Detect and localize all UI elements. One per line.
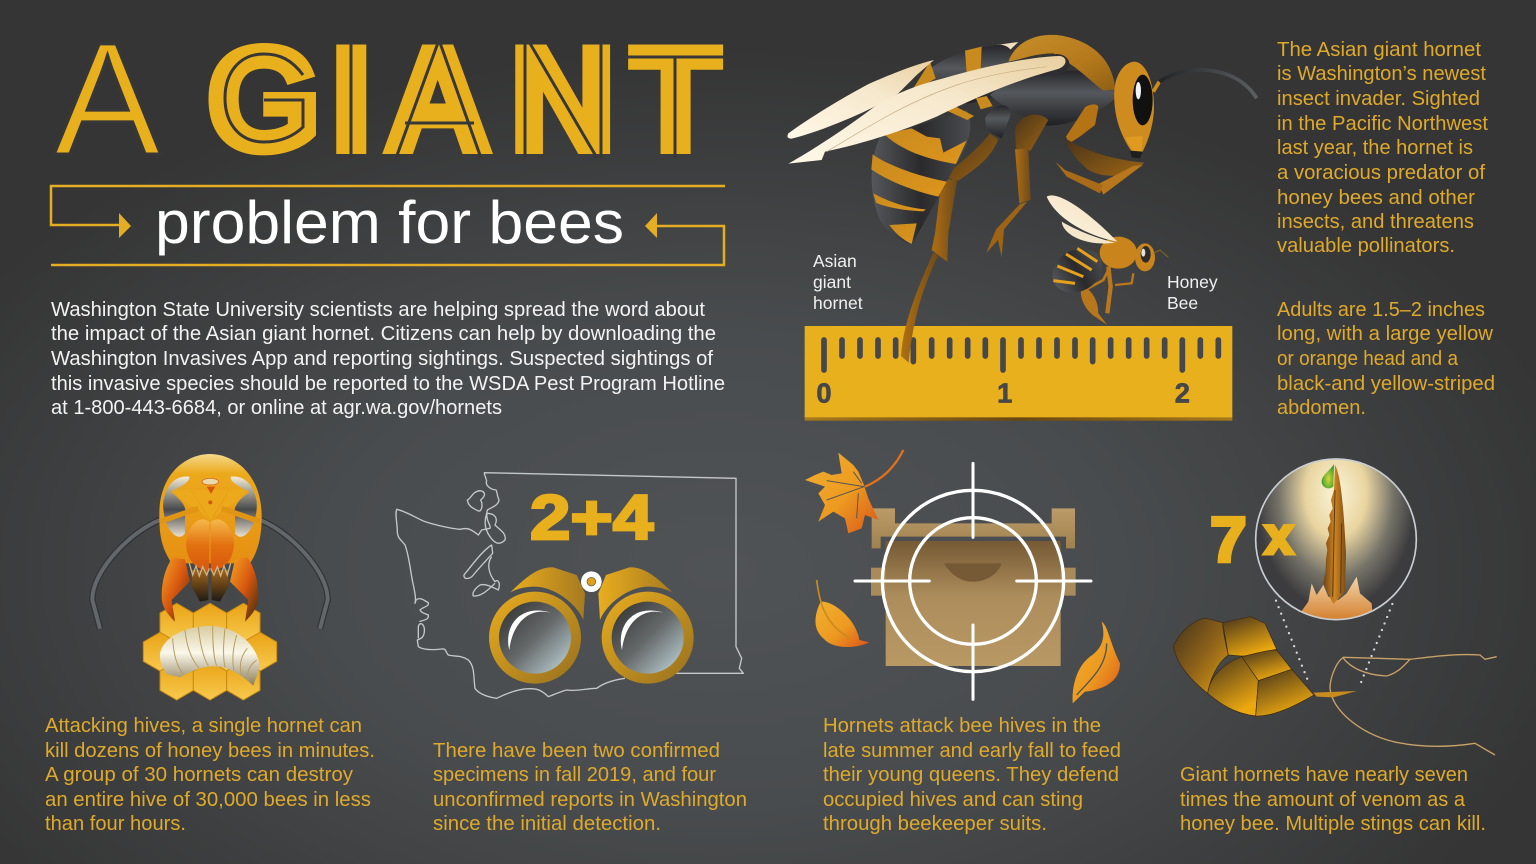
caption: timing: through beekeeper suits. <box>823 812 1047 835</box>
arrow: right-pointing <box>119 213 131 238</box>
right column text: size description <box>1277 298 1495 419</box>
hornet head and honeycomb illustration <box>92 454 328 700</box>
beehive target illustration <box>805 450 1120 703</box>
intro text block <box>51 298 725 419</box>
caption: venom: honey bee. Multiple stings can kill. <box>1180 812 1486 835</box>
caption: sightings <box>433 739 747 835</box>
ruler numbers <box>816 377 1190 408</box>
outer mandibles <box>162 557 190 622</box>
stat: 2+4: 2+4 <box>530 483 653 553</box>
title: A GIANT <box>54 9 726 188</box>
right column text: about the hornet: is Washington’s newest <box>1277 62 1486 85</box>
right column text: about the hornet: in the Pacific Northwest <box>1277 112 1488 135</box>
thorax hump <box>1008 35 1115 91</box>
right column text: about the hornet: a voracious predator of <box>1277 161 1485 184</box>
caption: timing <box>823 714 1121 835</box>
intro text block: Washington State University scientists are helping spread the word about <box>51 298 705 321</box>
caption: sightings: specimens in fall 2019, and four <box>433 763 716 786</box>
arrow: left-pointing <box>645 213 657 238</box>
caption: hive attacks: Attacking hives, a single hornet can <box>45 714 362 737</box>
honey bee illustration <box>1044 195 1168 325</box>
caption: sightings: unconfirmed reports in Washington <box>433 788 747 811</box>
beehive <box>871 508 1076 666</box>
magnified lens <box>1256 459 1416 623</box>
inner jaws <box>192 570 208 602</box>
label: Honey Bee <box>1167 272 1218 313</box>
right column text: about the hornet: insect invader. Sighted <box>1277 87 1480 110</box>
right column text: size description: black-and yellow-striped <box>1277 372 1495 395</box>
caption: timing: Hornets attack bee hives in the <box>823 714 1101 737</box>
front leg <box>1066 104 1098 143</box>
antenna <box>1153 82 1159 92</box>
abdomen <box>872 110 970 244</box>
caption: sightings: There have been two confirmed <box>433 739 720 762</box>
honeycomb <box>143 603 277 700</box>
right column text: size description: or orange head and a <box>1277 347 1459 370</box>
right column text: size description: abdomen. <box>1277 396 1366 419</box>
maple leaf <box>805 450 903 533</box>
binoculars <box>489 567 694 684</box>
right column text: about the hornet: honey bees and other <box>1277 186 1475 209</box>
caption: sightings: since the initial detection. <box>433 812 661 835</box>
stat: 7x <box>1210 505 1294 575</box>
caption: hive attacks: an entire hive of 30,000 bees in less <box>45 788 371 811</box>
caption: venom <box>1180 763 1486 835</box>
face plate <box>172 489 248 522</box>
larva <box>160 626 260 686</box>
stat: 7x: 7 <box>1210 505 1246 575</box>
label: Honey Bee: Honey <box>1167 272 1218 292</box>
clypeus lobes <box>186 519 209 572</box>
ruler numbers: 1 <box>997 377 1012 408</box>
right column text: about the hornet: valuable pollinators. <box>1277 234 1455 257</box>
hair tuft <box>1302 576 1372 619</box>
compound eyes <box>163 476 189 537</box>
label: Asian giant hornet <box>813 251 863 313</box>
antenna bases <box>160 508 260 522</box>
intro text block: the impact of the Asian giant hornet. Citizens can help by downloading the <box>51 322 716 345</box>
caption: timing: their young queens. They defend <box>823 763 1119 786</box>
antennae <box>92 520 328 629</box>
back legs <box>985 105 1011 138</box>
hornet abdomen <box>1173 617 1314 716</box>
back wing tip behind thorax <box>997 42 1018 50</box>
label: Asian giant hornet: hornet <box>813 293 863 313</box>
waist band <box>947 105 974 120</box>
caption: timing: occupied hives and can sting <box>823 788 1083 811</box>
subtitle frame with arrows <box>51 186 725 265</box>
stinger <box>1323 465 1346 604</box>
intro text block: Washington Invasives App and reporting sightings. Suspected sightings of <box>51 347 713 370</box>
ruler <box>805 326 1232 421</box>
hornet and bee size comparison <box>787 35 1257 421</box>
caption: venom: Giant hornets have nearly seven <box>1180 763 1468 786</box>
stat: 7x: x <box>1265 506 1294 564</box>
title word: GIANT: GIANT <box>207 18 720 180</box>
right column text: size description: Adults are 1.5–2 inches <box>1277 298 1485 321</box>
label: Asian giant hornet: giant <box>813 272 851 292</box>
intro text block: this invasive species should be reported to the WSDA Pest Program Hotline <box>51 372 725 395</box>
label: Honey Bee: Bee <box>1167 293 1198 313</box>
caption: venom: times the amount of venom as a <box>1180 788 1466 811</box>
state outline <box>396 473 743 698</box>
right column text: about the hornet <box>1277 38 1488 257</box>
right column text: about the hornet: The Asian giant hornet <box>1277 38 1481 61</box>
crosshair <box>855 463 1091 699</box>
ruler numbers: 2 <box>1175 377 1190 408</box>
thorax top <box>917 45 1013 103</box>
Asian giant hornet illustration <box>787 35 1257 363</box>
leaf: lower right <box>1073 622 1120 703</box>
right column text: about the hornet: last year, the hornet is <box>1277 136 1473 159</box>
dotted zoom lines <box>1276 601 1392 685</box>
Washington map with binoculars <box>396 473 743 698</box>
wings <box>787 60 934 139</box>
right column text: size description: long, with a large yellow <box>1277 322 1493 345</box>
head capsule <box>159 454 262 563</box>
title word: A: A <box>54 9 161 188</box>
middle leg <box>1015 114 1048 151</box>
ruler numbers: 0 <box>816 377 832 408</box>
venom drop <box>1322 464 1334 488</box>
hand outline with sting <box>1313 655 1497 755</box>
head <box>1114 62 1154 152</box>
caption: hive attacks: A group of 30 hornets can destroy <box>45 763 354 786</box>
caption: hive attacks <box>45 714 375 835</box>
venom stinger illustration <box>1173 459 1497 755</box>
label: Asian giant hornet: Asian <box>813 251 857 271</box>
intro text block: at 1-800-443-6684, or online at agr.wa.gov/hornets <box>51 396 502 419</box>
subtitle: problem for bees <box>155 189 624 256</box>
caption: timing: late summer and early fall to feed <box>823 739 1121 762</box>
leaf: left <box>815 580 869 647</box>
thorax lower <box>990 71 1117 126</box>
caption: hive attacks: kill dozens of honey bees in minutes. <box>45 739 375 762</box>
caption: hive attacks: than four hours. <box>45 812 186 835</box>
right column text: about the hornet: insects, and threatens <box>1277 210 1474 233</box>
